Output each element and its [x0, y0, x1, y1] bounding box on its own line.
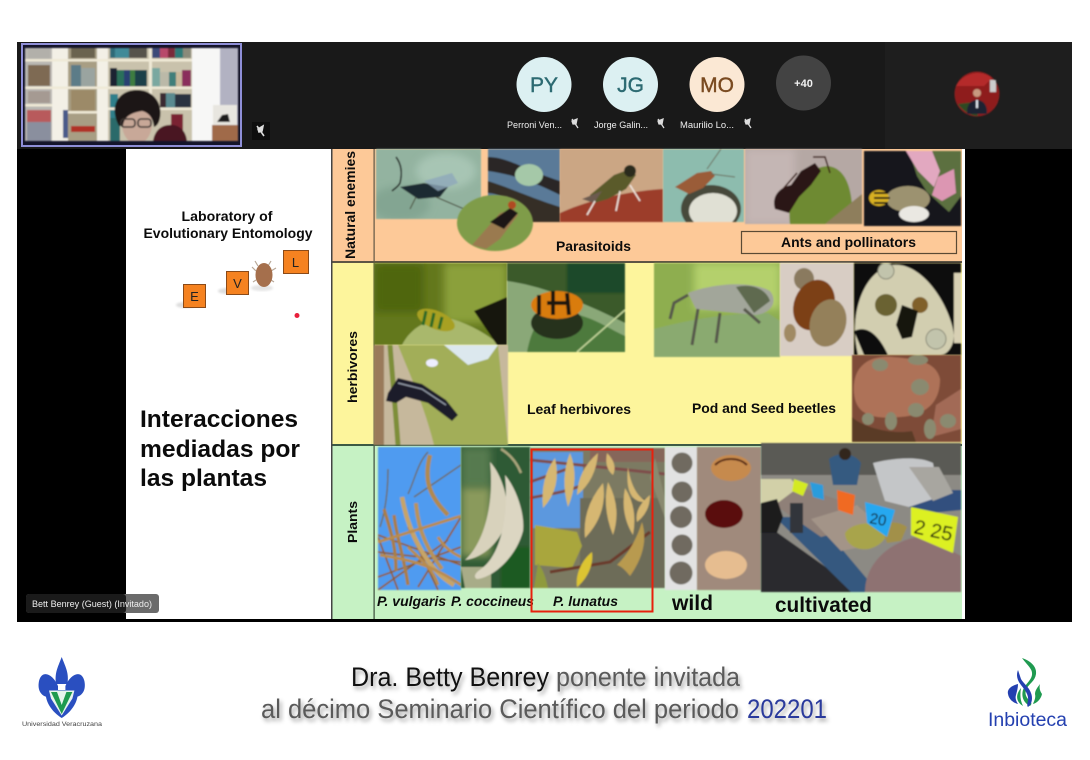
label: natural enemies: Natural enemies [343, 151, 358, 259]
footer caption: ponente invitada [556, 662, 741, 692]
label: wild: wild [671, 592, 713, 615]
label: plants: Plants [345, 501, 360, 543]
photo: P. coccineus pods [461, 447, 530, 588]
species labels: P. coccineus [451, 593, 534, 609]
slide title: Interacciones [140, 406, 298, 433]
footer caption: al décimo Seminario Científico del periodo [261, 694, 739, 724]
logo: Inbioteca: Inbioteca [988, 710, 1067, 731]
participant: Jorge: Jorge Galin... [594, 120, 648, 131]
slide heading: laboratory: Evolutionary Entomology [144, 225, 313, 241]
tag: speaker name [26, 594, 159, 613]
price labels: 20 [868, 510, 888, 530]
photo: P. vulgaris pods [378, 447, 461, 590]
participant: Maurilio: Maurilio Lo... [680, 120, 734, 131]
species labels [377, 593, 618, 609]
species labels: P. lunatus [553, 593, 618, 609]
tag: speaker name: Bett Benrey (Guest) (Invitado) [32, 599, 152, 610]
photo: bee on pink flower [864, 151, 961, 226]
box: ants and pollinators [742, 232, 956, 254]
books [25, 48, 192, 141]
photo: caterpillar on leaf [374, 345, 508, 445]
logo: Universidad Veracruzana [22, 657, 102, 728]
slide background [126, 149, 332, 619]
participant: Perroni: Perroni Ven... [507, 120, 562, 131]
participant: Jorge: JG [617, 74, 644, 97]
slide heading: laboratory [144, 208, 313, 241]
footer caption: Dra. Betty Benrey [351, 662, 549, 692]
slide title: mediadas por [140, 436, 300, 463]
EVL logo: V [233, 276, 242, 291]
photo: weevil [654, 263, 780, 357]
photo: seed with beetle [854, 263, 961, 355]
label: pod and seed beetles: Pod and Seed beetles [692, 400, 836, 416]
label: parasitoids: Parasitoids [556, 238, 631, 254]
panel: natural enemies [331, 149, 962, 263]
participant: Maurilio: MO [700, 74, 734, 97]
desk items [212, 105, 238, 141]
label: herbivores: herbivores [345, 331, 360, 403]
top participant bar [17, 42, 1072, 149]
label: cultivated: cultivated [775, 594, 872, 617]
participant: Maurilio [680, 57, 751, 131]
more participants badge [776, 56, 831, 110]
laser pointer dot [294, 313, 300, 318]
logo: Inbioteca [988, 658, 1067, 731]
photo: market stall [761, 443, 961, 592]
photo: orange beetle [507, 263, 625, 352]
participant: Jorge [594, 57, 664, 131]
photo: market stall: 2 25 [912, 516, 955, 546]
box: ants and pollinators: Ants and pollinators [781, 234, 916, 250]
EVL logo [176, 250, 308, 318]
person [115, 90, 187, 144]
EVL logo: E [190, 289, 199, 304]
icon: speaker muted [252, 122, 270, 140]
photo: leaf insect [488, 149, 560, 222]
photo: wasp on egg [663, 149, 744, 233]
photo: striped beetle [374, 263, 507, 345]
icon: bug [252, 261, 276, 287]
table: trophic levels [331, 149, 965, 619]
photo: wasp on red surface [560, 149, 663, 222]
photo: seeds with beetles [852, 355, 961, 442]
slide title [140, 406, 300, 492]
photo: P. lunatus pods [530, 448, 665, 588]
slide title: las plantas [140, 465, 267, 492]
EVL logo: L [292, 255, 299, 270]
speaker video thumbnail [21, 43, 242, 147]
photo: ant on green pod [745, 149, 862, 224]
footer caption: 202201 [747, 694, 827, 724]
highlight: P. lunatus [532, 450, 652, 612]
photo: parasitoid on leaf [370, 149, 481, 222]
photo: brown beetle [780, 263, 854, 356]
footer caption [261, 662, 827, 724]
video conference frame [17, 42, 1072, 622]
profile photo [954, 72, 1000, 116]
slide heading: laboratory: Laboratory of [182, 208, 273, 224]
photo: cultivated seeds [697, 447, 761, 590]
photo: wild seeds [665, 447, 698, 590]
more participants badge: +40 [794, 78, 813, 90]
logo: Universidad Veracruzana: Universidad Veracruzana [22, 721, 102, 728]
photo: parasitoid in oval [457, 195, 533, 251]
label: leaf herbivores: Leaf herbivores [527, 401, 631, 417]
panel: plants [332, 443, 962, 619]
participant: Perroni: PY [530, 74, 558, 97]
species labels: P. vulgaris [377, 593, 446, 609]
panel: herbivores [331, 263, 962, 446]
participant: Perroni [507, 57, 578, 131]
